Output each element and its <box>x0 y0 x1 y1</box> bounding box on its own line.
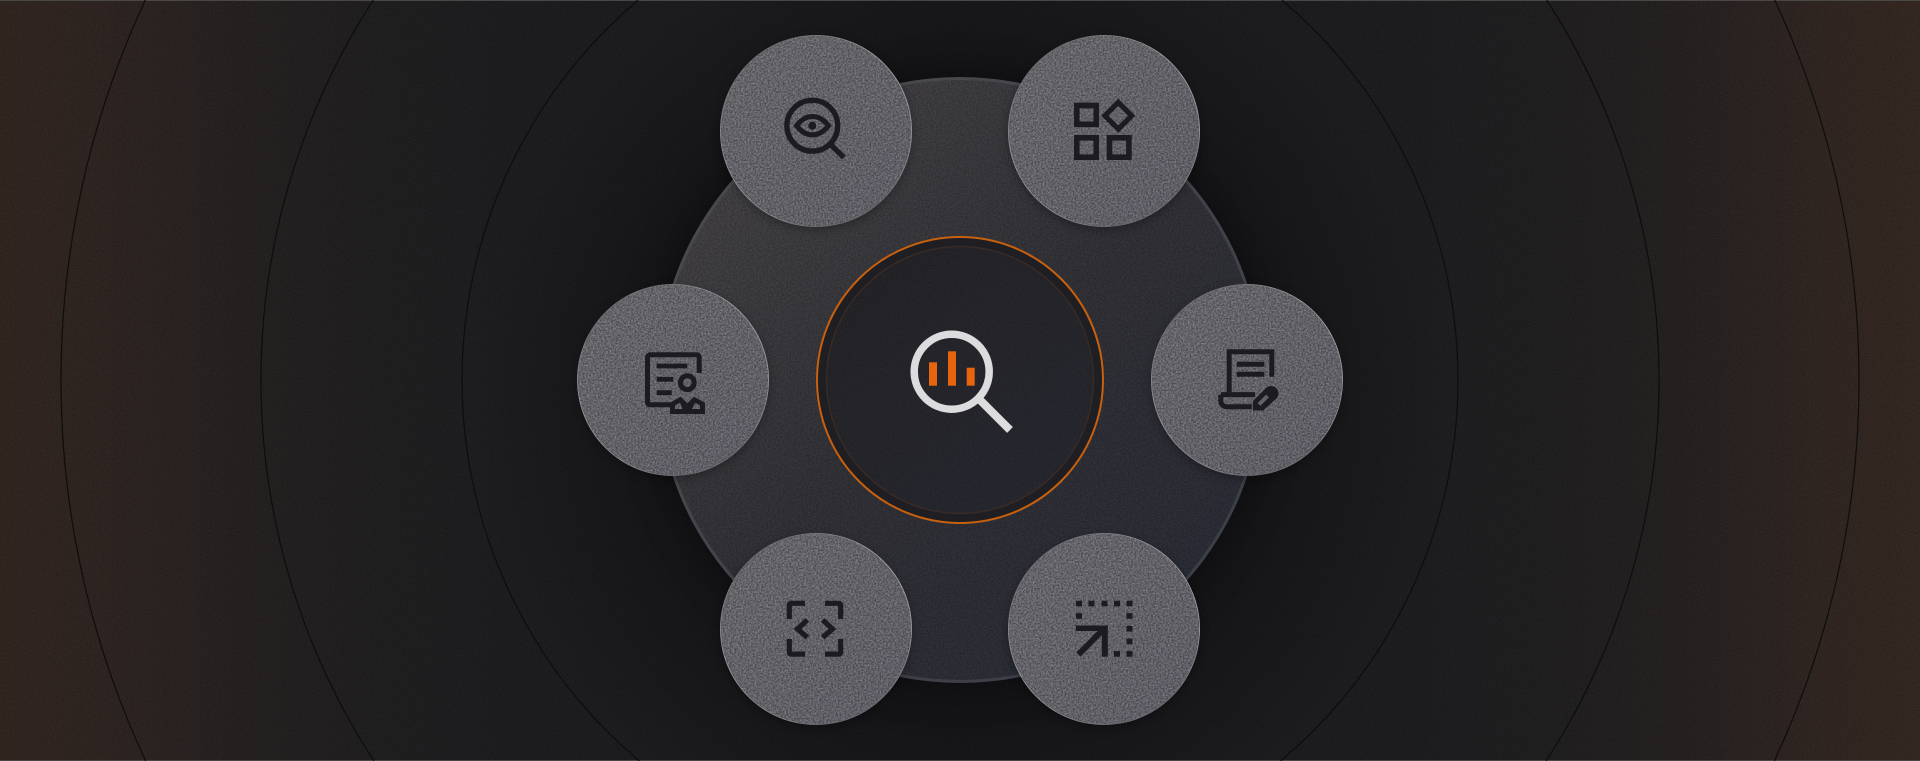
icon: scroll and pen <box>1221 352 1279 410</box>
icon: document with person <box>648 355 705 414</box>
node: bottom-right resize arrow <box>1008 533 1200 728</box>
hub rings <box>817 237 1103 523</box>
icon: focus brackets with code chevrons <box>789 603 841 654</box>
node: top-right shapes <box>1008 35 1200 230</box>
node: left document with person <box>577 284 769 479</box>
node: bottom-left code brackets <box>720 533 912 728</box>
icon: magnifying glass with bar chart <box>914 334 1010 430</box>
node: right scroll with pen <box>1151 284 1343 479</box>
icon: dotted square with arrow <box>1076 601 1132 657</box>
icon: squares and diamond <box>1077 102 1132 157</box>
icon: eye in magnifier <box>787 100 844 158</box>
central hub with analytics magnifier <box>817 237 1103 523</box>
node: top-left eye search <box>720 35 912 230</box>
large central disc <box>657 77 1263 683</box>
